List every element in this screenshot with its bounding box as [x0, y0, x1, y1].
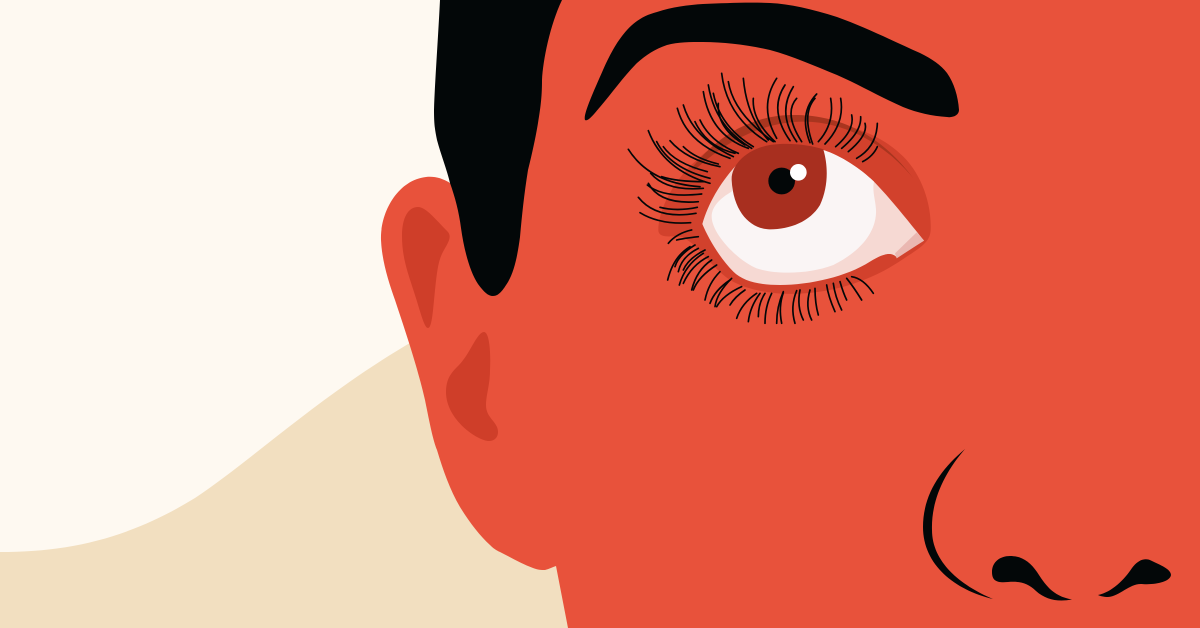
eyebrow	[585, 3, 959, 120]
eye highlight	[790, 164, 807, 181]
sclera shadow	[702, 148, 924, 285]
right nostril	[1098, 559, 1171, 597]
lower eyelashes	[668, 230, 873, 323]
background: tan shoulder shape	[0, 340, 600, 628]
left nostril	[992, 556, 1072, 600]
eye	[628, 73, 931, 323]
ear inner fold upper	[402, 207, 450, 328]
upper eyelashes	[628, 73, 877, 223]
nose bridge line	[923, 449, 993, 599]
face and ear	[381, 0, 1200, 628]
sclera white	[712, 148, 876, 273]
iris	[732, 144, 827, 229]
eyelid crease	[692, 115, 913, 178]
hair	[434, 0, 562, 296]
eye socket shadow	[658, 119, 931, 294]
eye corner	[895, 232, 924, 258]
pupil	[768, 168, 795, 194]
ear inner fold lower	[446, 332, 498, 441]
